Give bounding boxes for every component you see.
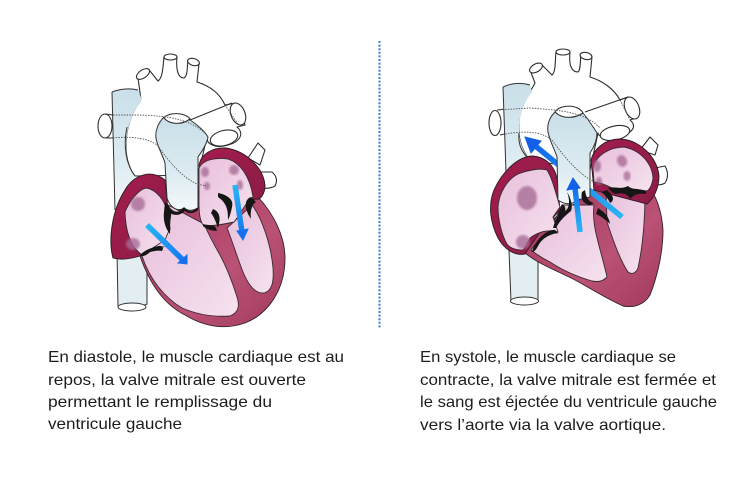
vena cava tube	[503, 83, 538, 305]
valves	[532, 186, 646, 252]
text block: diastole: repos, la valve mitrale est ouverte	[48, 372, 306, 389]
arrow: filling right	[147, 225, 187, 264]
pulmonary trunk	[548, 112, 597, 204]
text block: diastole: permettant le remplissage du	[48, 394, 272, 411]
text block: systole: contracte, la valve mitrale est fermée et	[420, 372, 717, 389]
left atrium	[591, 139, 659, 204]
heart diagram: systole	[489, 49, 668, 307]
right atrium	[491, 156, 560, 254]
left ventricle cavity	[227, 205, 273, 293]
valves	[140, 193, 256, 256]
text block: diastole: ventricule gauche	[48, 416, 182, 433]
left atrium	[199, 148, 265, 226]
right ventricle cavity	[531, 205, 607, 282]
pulmonary vein stubs	[640, 137, 668, 185]
muscle wall	[140, 190, 285, 327]
right ventricle cavity	[142, 205, 238, 316]
arrow: filling left	[235, 185, 248, 240]
dotted vessels behind the trunk	[113, 105, 238, 186]
pulmonary trunk	[156, 117, 208, 210]
text block: diastole: En diastole, le muscle cardiaque est au	[48, 349, 344, 366]
aorta and pulmonary branches	[489, 49, 643, 170]
text block: diastole	[48, 349, 344, 433]
pulmonary vein stubs	[248, 143, 276, 188]
arrow: ventricle to aorta	[567, 178, 580, 232]
trunk opening	[164, 114, 190, 123]
text block: systole	[420, 349, 717, 434]
dotted vessels behind the trunk	[497, 100, 630, 185]
heart diagram: diastole	[98, 54, 285, 327]
vena cava tube	[112, 89, 147, 311]
left ventricle cavity	[606, 190, 645, 273]
aorta and pulmonary branches	[98, 54, 249, 176]
divider: dotted line	[378, 41, 380, 328]
text block: systole: En systole, le muscle cardiaque se	[420, 349, 676, 366]
trunk opening	[555, 106, 583, 117]
text block: systole: le sang est éjectée du ventricule gauche	[420, 394, 717, 411]
right atrium	[111, 174, 170, 259]
muscle wall	[525, 185, 663, 307]
arrow: ejection to aorta, body	[525, 137, 622, 217]
text block: systole: vers l’aorte via la valve aortique.	[420, 417, 666, 434]
